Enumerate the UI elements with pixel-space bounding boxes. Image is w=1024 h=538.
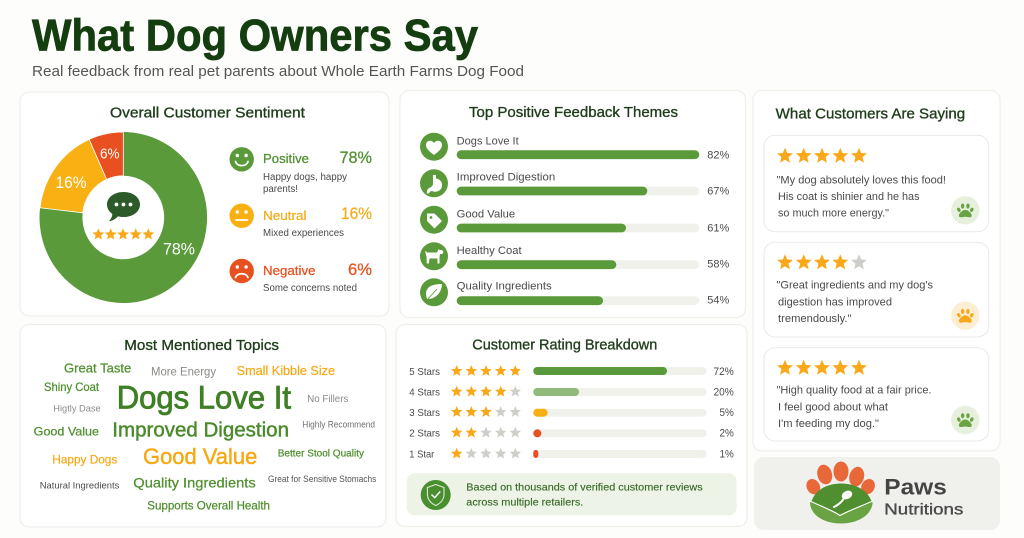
legend: positive: 78% [340,148,372,167]
word cloud: No Fillers [307,393,348,405]
review card 2: tremendously." [778,313,852,325]
theme: healthy coat: 58% [707,259,730,271]
word cloud: More Energy [151,364,216,378]
donut chart: 6% [100,146,120,162]
rating row: 1 star: 1% [720,448,734,460]
callout: verified reviews [407,473,737,515]
legend: positive: parents! [263,184,298,195]
review card 3 [764,348,989,441]
logo text: Nutritions [884,501,963,518]
theme: good value: 61% [707,222,730,234]
rating row: 3 stars: 5% [720,407,734,419]
word cloud: Highly Recommend [302,419,375,430]
heading: rating: Customer Rating Breakdown [472,336,657,353]
theme: dogs love it: Dogs Love It [457,135,519,147]
title: What Dog Owners Say [32,12,478,60]
review card 1 [764,135,989,232]
word cloud: Good Value [143,444,257,469]
rating row: 5 stars: 5 Stars [409,366,440,378]
logo text: Paws [884,474,947,499]
rating row: 2 stars: 2% [720,428,734,440]
legend: negative: 6% [348,260,372,279]
review card 1: "My dog absolutely loves this food! [776,175,946,187]
panel: customer rating breakdown [396,324,747,526]
icon: paw and bowl logo [804,462,878,524]
legend: positive [230,147,372,195]
review card 3: I'm feeding my dog." [778,418,879,430]
theme: improved digestion [420,169,730,198]
theme: improved digestion: 67% [707,186,730,198]
theme: healthy coat [420,242,730,271]
review card 2 [764,242,989,337]
word cloud: Better Stool Quality [278,448,365,460]
legend: neutral: Mixed experiences [263,228,344,239]
word cloud: Good Value [34,424,99,438]
legend: neutral [230,204,372,239]
theme: quality ingredients [420,278,730,307]
review card 3: I feel good about what [778,401,888,413]
donut chart: 16% [56,174,87,192]
review card 1: His coat is shinier and he has [778,191,920,203]
theme: dogs love it: 82% [707,149,730,161]
heading: topics: Most Mentioned Topics [124,337,279,354]
legend: negative: Negative [263,263,316,278]
theme: improved digestion: Improved Digestion [457,172,555,184]
donut chart: 78% [163,240,195,258]
panel: logo [754,457,1000,530]
icon: speech bubble with stars [92,192,154,240]
review card 2: digestion has improved [778,296,892,308]
rating row: 1 star: 1 Star [409,448,435,460]
rating row: 5 stars [409,365,734,378]
panel: most mentioned topics [20,324,386,527]
legend: negative: Some concerns noted [263,283,357,294]
heading: sentiment: Overall Customer Sentiment [110,104,306,122]
word cloud: Small Kibble Size [237,364,335,378]
logo text [884,474,963,518]
heading: themes: Top Positive Feedback Themes [469,104,678,121]
rating row: 2 stars: 2 Stars [409,428,440,440]
review card 1: so much more energy." [778,208,889,220]
callout: verified reviews: across multiple retailers. [466,497,583,509]
legend: positive: Positive [263,151,309,166]
word cloud: Natural Ingredients [40,480,120,491]
word cloud: Improved Digestion [112,419,289,442]
review card 3: "High quality food at a fair price. [776,385,932,397]
panel: overall customer sentiment [20,92,389,316]
word cloud: Supports Overall Health [147,499,270,513]
rating row: 2 stars [409,427,734,440]
word cloud: Shiny Coat [44,380,100,394]
panel: top positive feedback themes [400,90,746,318]
legend: negative [230,259,372,294]
legend: neutral: Neutral [263,208,307,223]
rating row: 3 stars [409,406,734,419]
heading: customer quotes: What Customers Are Saying [776,105,965,122]
rating row: 4 stars [409,386,734,399]
rating row: 4 stars: 4 Stars [409,387,440,399]
word cloud: Higtly Dase [53,403,101,414]
word cloud: Happy Dogs [52,452,117,466]
theme: good value [420,206,730,234]
legend: positive: Happy dogs, happy [263,172,347,183]
rating row: 3 stars: 3 Stars [409,407,440,419]
subtitle: Real feedback from real pet parents about Whole Earth Farms Dog Food [32,64,524,80]
theme: quality ingredients: Quality Ingredients [457,280,552,292]
theme: quality ingredients: 54% [707,295,730,307]
rating row: 1 star [409,448,734,460]
rating row: 5 stars: 72% [714,366,734,378]
word cloud: Quality Ingredients [133,474,256,490]
donut chart [40,132,207,303]
review card 2: "Great ingredients and my dog's [776,279,933,291]
theme: good value: Good Value [457,208,515,220]
callout: verified reviews: Based on thousands of verified customer reviews [466,482,703,494]
panel: what customers are saying [753,90,1000,451]
theme: dogs love it [420,133,730,161]
word cloud [34,361,377,513]
theme: healthy coat: Healthy Coat [457,245,522,257]
rating row: 4 stars: 20% [714,387,734,399]
legend: neutral: 16% [341,204,372,223]
word cloud: Dogs Love It [117,380,291,416]
word cloud: Great for Sensitive Stomachs [268,474,377,484]
word cloud: Great Taste [64,361,131,376]
